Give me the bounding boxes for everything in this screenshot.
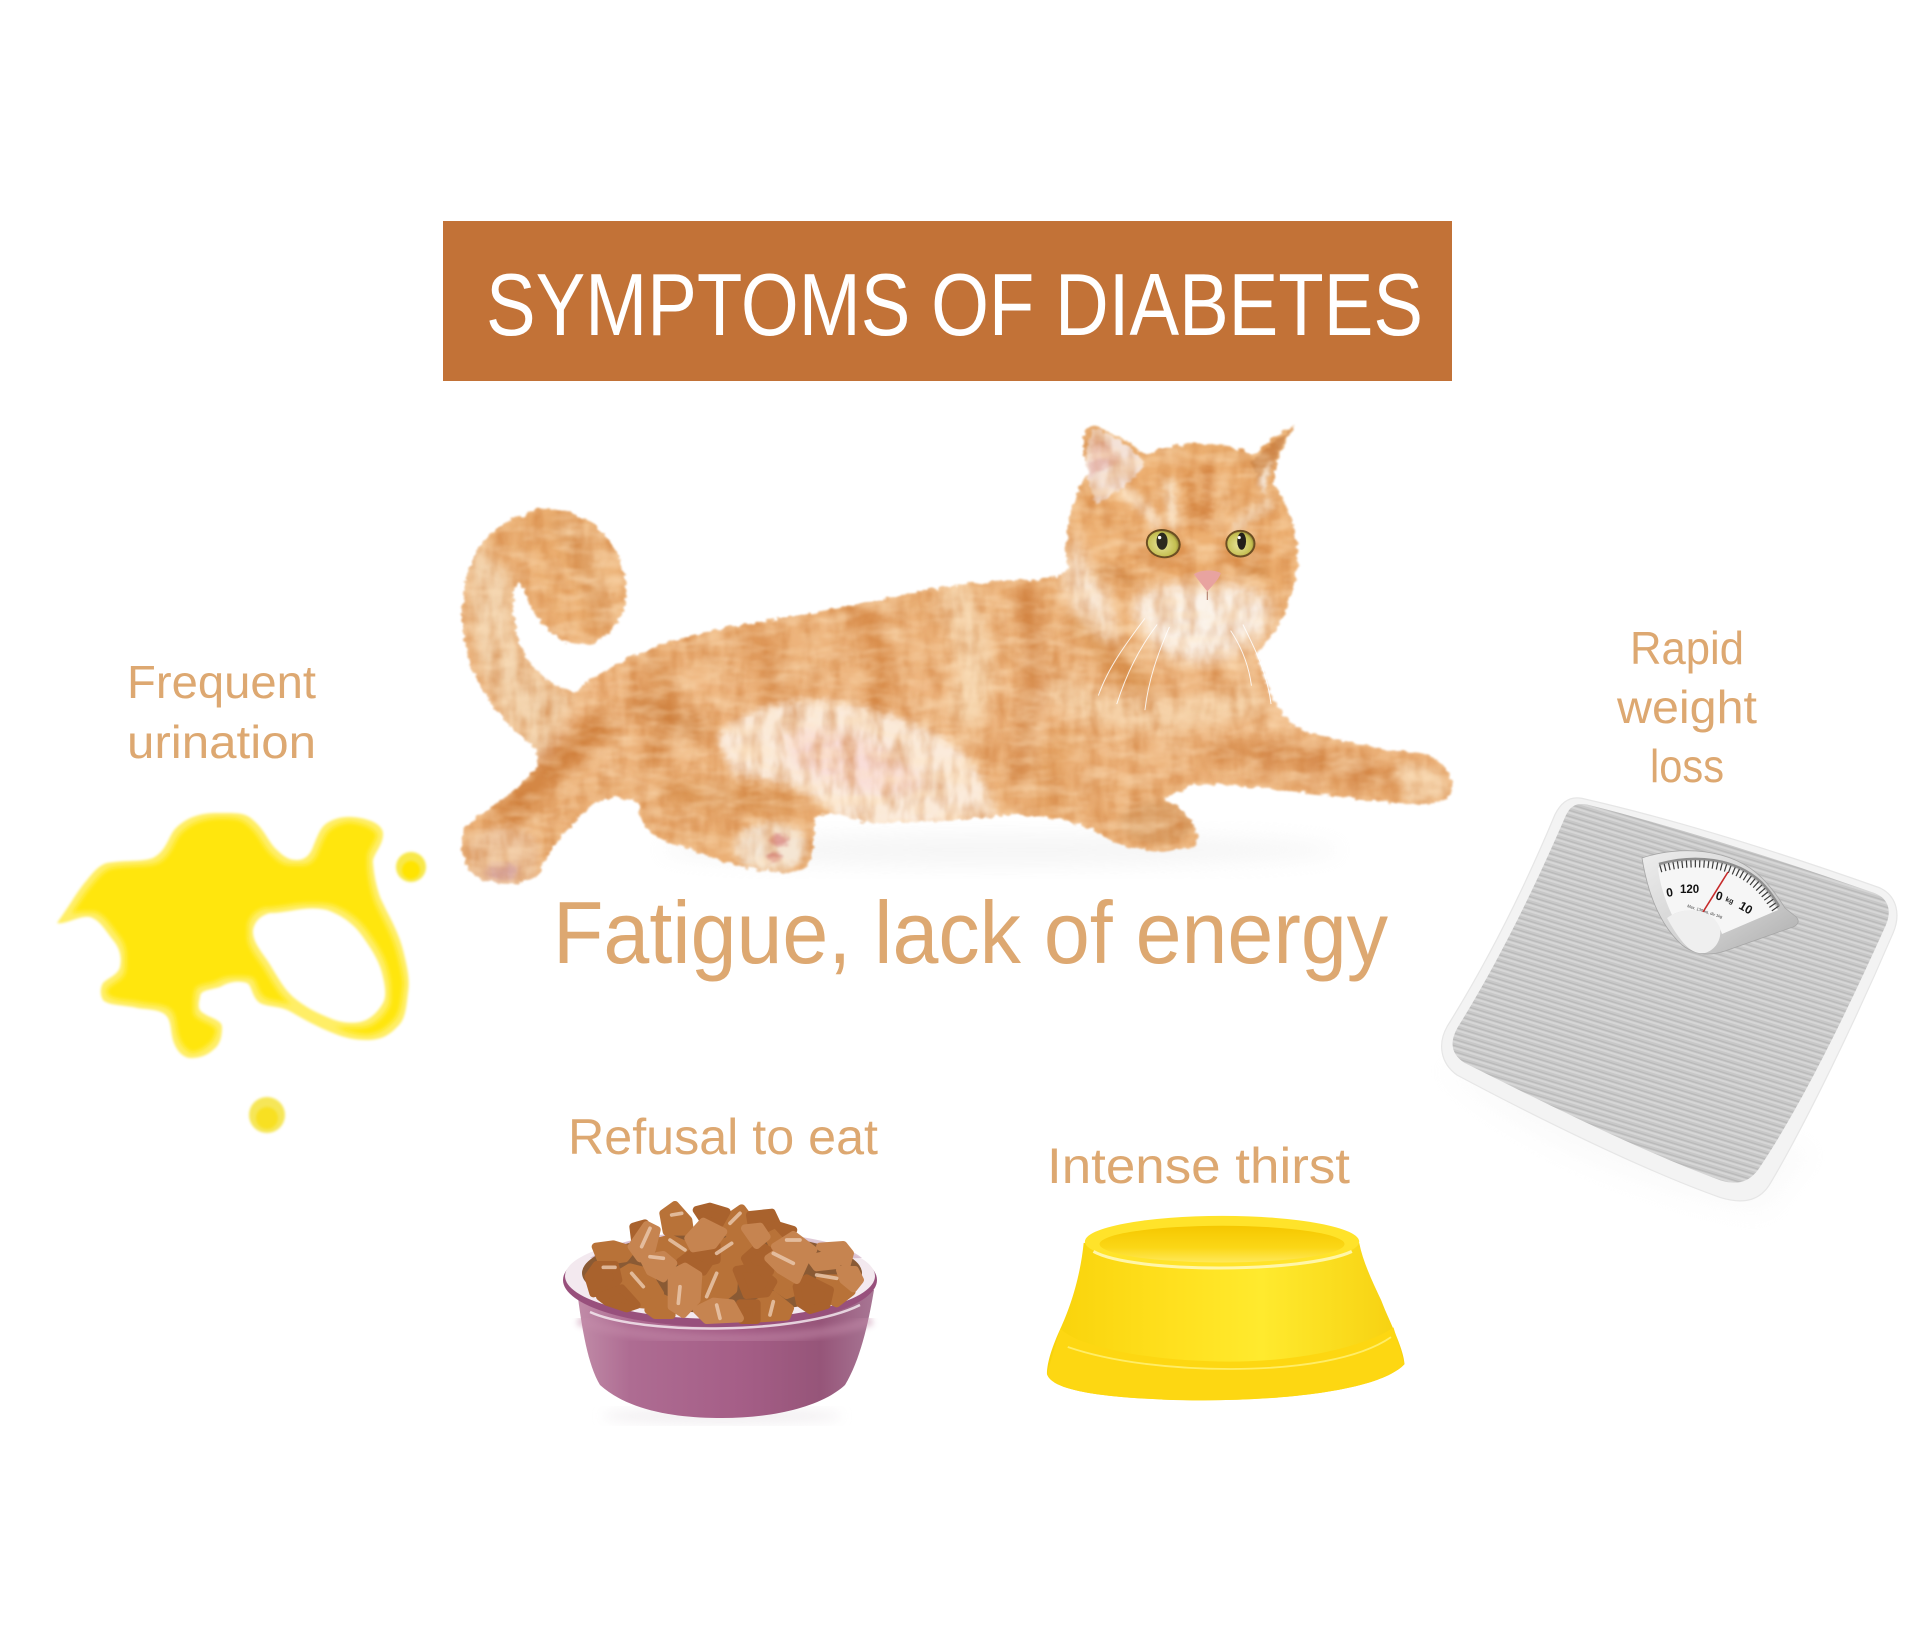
scale dial	[1642, 851, 1798, 954]
scale dial: 0	[1714, 888, 1725, 904]
bowl rim	[563, 1233, 877, 1327]
cat eyes	[1144, 527, 1255, 560]
label: frequent urination: urination	[127, 716, 316, 768]
cat face	[1098, 527, 1271, 710]
cat shadow	[660, 834, 1340, 866]
ears	[1086, 429, 1145, 504]
scale dial: 0	[1665, 885, 1674, 900]
photo: purple bowl of food	[563, 1205, 877, 1424]
bowl body	[1047, 1243, 1405, 1400]
label: frequent urination	[127, 656, 316, 768]
label: rapid weight loss: weight	[1616, 681, 1757, 733]
title banner	[443, 221, 1452, 381]
photo: ginger cat	[459, 424, 1454, 886]
head stripes	[1096, 465, 1273, 585]
label: frequent urination: Frequent	[127, 656, 316, 708]
scale dial: 10	[1736, 898, 1755, 917]
cat whiskers	[1098, 618, 1271, 710]
base band highlight	[1047, 1327, 1405, 1400]
cat nose	[1194, 570, 1221, 591]
bowl body	[577, 1290, 874, 1418]
droplet	[396, 852, 426, 882]
label: rapid weight loss	[1616, 622, 1757, 792]
paws	[465, 827, 539, 888]
label: rapid weight loss: Rapid	[1630, 622, 1744, 674]
photo: yellow puddle	[57, 813, 426, 1133]
label: fatigue: Fatigue, lack of energy	[553, 883, 1388, 982]
label: refusal to eat: Refusal to eat	[568, 1109, 878, 1165]
food chunks	[588, 1205, 860, 1320]
scale dial: kg	[1724, 896, 1734, 906]
scale dial: Max. 130 kg, div 1kg	[1687, 903, 1723, 919]
label: intense thirst: Intense thirst	[1047, 1138, 1350, 1194]
title text: SYMPTOMS OF DIABETES	[486, 255, 1423, 354]
droplet	[249, 1097, 285, 1133]
head	[1066, 557, 1068, 558]
label: rapid weight loss: loss	[1650, 740, 1724, 792]
scale dial: 120	[1680, 884, 1699, 896]
muzzle and chin	[1133, 582, 1273, 662]
photo: bathroom scale	[1441, 797, 1898, 1202]
photo: yellow water bowl	[1047, 1216, 1405, 1400]
belly	[716, 700, 998, 830]
bowl rim	[1085, 1216, 1359, 1267]
